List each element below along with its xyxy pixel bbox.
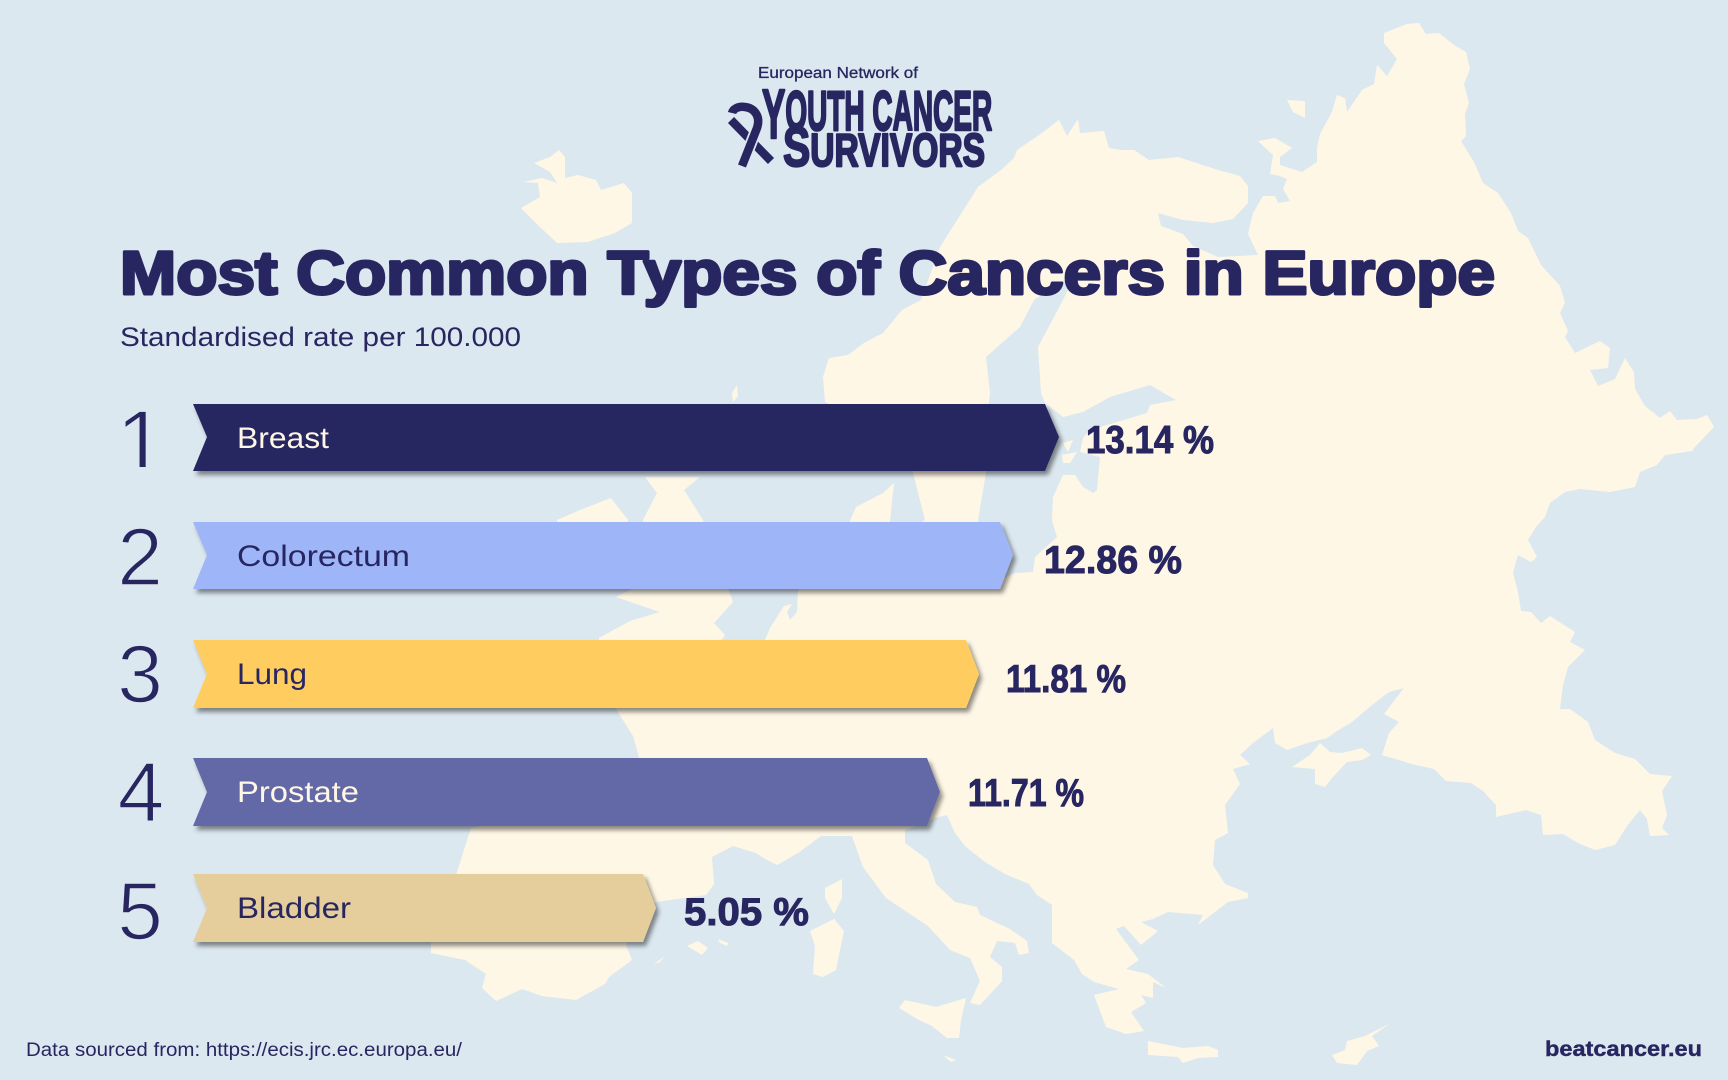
logo wordmark line 1: OUTH CANCER [785, 81, 992, 143]
Iceland [521, 150, 632, 243]
Sicily [899, 998, 966, 1038]
rank 3 row [117, 629, 1126, 720]
value: 11.81 %: 11.81 % [1006, 658, 1126, 701]
ribbon icon [731, 107, 771, 166]
rank 2 row [117, 512, 1182, 603]
bar: Lung [193, 640, 979, 708]
Kolguev island [1287, 100, 1305, 118]
value: 12.86 %: 12.86 % [1044, 539, 1182, 582]
ranking chart [116, 393, 1214, 957]
map of Europe [431, 23, 1714, 1065]
rank number 4: 4 [118, 745, 164, 839]
value: 13.14 %: 13.14 % [1086, 419, 1214, 462]
bar: Colorectum [193, 522, 1013, 589]
label: Bladder: Bladder [237, 892, 351, 925]
value: 11.71 %: 11.71 % [968, 772, 1084, 815]
logo [731, 65, 992, 179]
rank number 5: 5 [117, 866, 163, 957]
label: Breast: Breast [237, 422, 330, 455]
mainland Europe [431, 23, 1714, 1034]
Faroe Islands [732, 385, 738, 402]
value: 5.05 %: 5.05 % [684, 891, 809, 934]
bar: Prostate [193, 758, 940, 826]
Baltic islands [1063, 440, 1073, 452]
rank 5 row [117, 866, 809, 957]
logo wordmark line 2: SURVIVORS [783, 117, 985, 179]
Baltic Sea [978, 275, 1176, 580]
logo wordmark line 1: Y [762, 75, 785, 153]
Cyprus [1332, 1024, 1389, 1065]
British Isles [599, 477, 733, 650]
rank 1 row [126, 404, 1214, 478]
logo overline: European Network of [758, 65, 919, 82]
label: Prostate: Prostate [237, 776, 359, 809]
Ireland [557, 498, 628, 588]
rank 4 row [118, 745, 1084, 839]
rank number 3: 3 [117, 629, 163, 720]
website: beatcancer.eu [1545, 1038, 1702, 1061]
Balearic Islands [687, 941, 708, 955]
bar: Breast [193, 404, 1059, 471]
label: Colorectum: Colorectum [237, 540, 410, 573]
rank number 2: 2 [117, 512, 163, 603]
source note: Data sourced from: https://ecis.jrc.ec.europa.eu/ [26, 1040, 463, 1061]
subtitle: Standardised rate per 100.000 [120, 322, 521, 352]
rank number 1: 1 [116, 393, 166, 493]
Sardinia [810, 919, 844, 977]
Crete [1148, 1041, 1218, 1063]
label: Lung: Lung [237, 658, 307, 691]
Netherlands coast fragment [850, 483, 894, 540]
title: Most Common Types of Cancers in Europe [120, 239, 1495, 307]
Crimea [1292, 743, 1371, 787]
Corsica [825, 879, 842, 914]
bar: Bladder [193, 874, 656, 942]
